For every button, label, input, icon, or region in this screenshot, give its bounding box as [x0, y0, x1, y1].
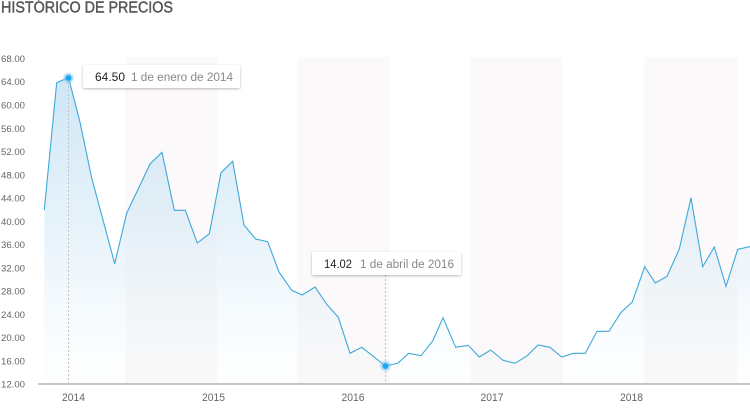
alternating year bands: [125, 57, 737, 383]
title: HISTÓRICO DE PRECIOS: [1, 0, 173, 16]
y axis labels: 64.00: [1, 77, 25, 88]
marker: 2016 low: [381, 362, 390, 370]
y axis labels: 56.00: [1, 124, 25, 135]
tooltip: 64.50 on 1 de enero de 2014: 64.50: [95, 70, 125, 84]
y axis labels: 60.00: [1, 100, 25, 112]
y axis labels: 68.00: [1, 54, 25, 65]
dotted marker line 2016: [384, 275, 386, 383]
y axis labels: 44.00: [1, 194, 25, 204]
x axis line: [38, 383, 750, 385]
y axis labels: 52.00: [1, 147, 25, 158]
y axis labels: [1, 54, 25, 390]
y axis labels: 28.00: [1, 286, 25, 298]
x axis year labels: 2017: [480, 392, 504, 404]
y axis labels: 24.00: [1, 310, 25, 321]
y axis labels: 40.00: [1, 217, 25, 228]
x axis year labels: 2015: [202, 392, 225, 404]
y axis labels: 20.00: [1, 333, 25, 344]
marker: 2014 peak: [64, 74, 73, 82]
tooltip: 64.50 on 1 de enero de 2014: [83, 65, 240, 88]
y axis labels: 12.00: [1, 380, 25, 390]
tooltip: 14.02 on 1 de abril de 2016: 1 de abril de 2016: [360, 259, 454, 271]
x axis year labels: 2018: [620, 392, 643, 404]
x axis year labels: [62, 392, 643, 404]
tooltip: 14.02 on 1 de abril de 2016: 14.02: [324, 257, 352, 271]
x axis year labels: 2014: [62, 392, 85, 404]
y axis labels: 16.00: [1, 356, 25, 368]
y axis labels: 48.00: [1, 170, 25, 182]
x axis year labels: 2016: [342, 392, 364, 404]
dotted marker line 2014: [68, 78, 70, 383]
price line: [44, 78, 750, 366]
area under price line: [44, 78, 750, 383]
y axis labels: 36.00: [1, 240, 25, 251]
y axis labels: 32.00: [1, 264, 25, 274]
tooltip: 64.50 on 1 de enero de 2014: 1 de enero de 2014: [131, 72, 234, 84]
tooltip: 14.02 on 1 de abril de 2016: [312, 252, 461, 275]
